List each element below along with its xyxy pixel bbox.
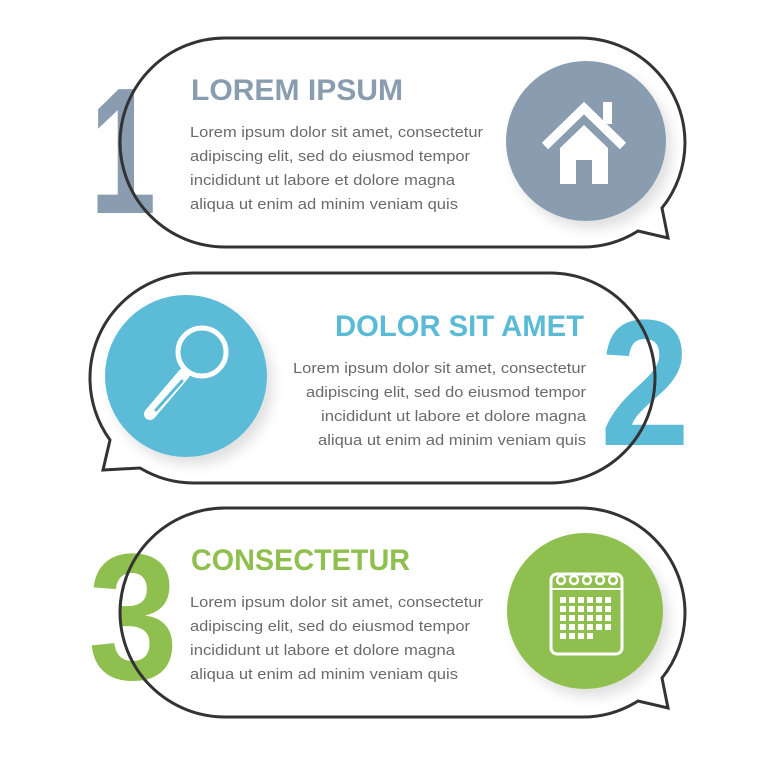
body text: adipiscing elit, sed do eiusmod tempor	[306, 384, 586, 401]
bubble 3 outline	[120, 508, 685, 717]
body text: Lorem ipsum dolor sit amet, consectetur	[190, 594, 483, 611]
heading: DOLOR SIT AMET	[335, 310, 584, 343]
body text: aliqua ut enim ad minim veniam quis	[190, 196, 458, 213]
panel: step 3	[120, 508, 685, 717]
body text: incididunt ut labore et dolore magna	[321, 408, 587, 425]
body text: aliqua ut enim ad minim veniam quis	[190, 666, 458, 683]
body text	[293, 360, 587, 449]
body text: adipiscing elit, sed do eiusmod tempor	[190, 618, 470, 635]
body text: incididunt ut labore et dolore magna	[190, 642, 456, 659]
icon: house	[506, 61, 666, 221]
icon: magnifier	[105, 295, 267, 457]
panel: step 1	[120, 38, 685, 247]
body text	[190, 124, 483, 213]
bubble 1 outline	[120, 38, 685, 247]
body text: incididunt ut labore et dolore magna	[190, 172, 456, 189]
body text: adipiscing elit, sed do eiusmod tempor	[190, 148, 470, 165]
icon: calendar	[507, 533, 663, 689]
number 2: 2	[600, 283, 690, 484]
heading: CONSECTETUR	[191, 544, 410, 577]
body text	[190, 594, 483, 683]
body text: Lorem ipsum dolor sit amet, consectetur	[190, 124, 483, 141]
number 3: 3	[88, 517, 178, 718]
number 1: 1	[90, 51, 156, 252]
panel: step 2	[90, 273, 655, 483]
body text: Lorem ipsum dolor sit amet, consectetur	[293, 360, 586, 377]
bubble 2 outline	[90, 273, 655, 483]
body text: aliqua ut enim ad minim veniam quis	[318, 432, 586, 449]
heading: LOREM IPSUM	[191, 74, 403, 107]
